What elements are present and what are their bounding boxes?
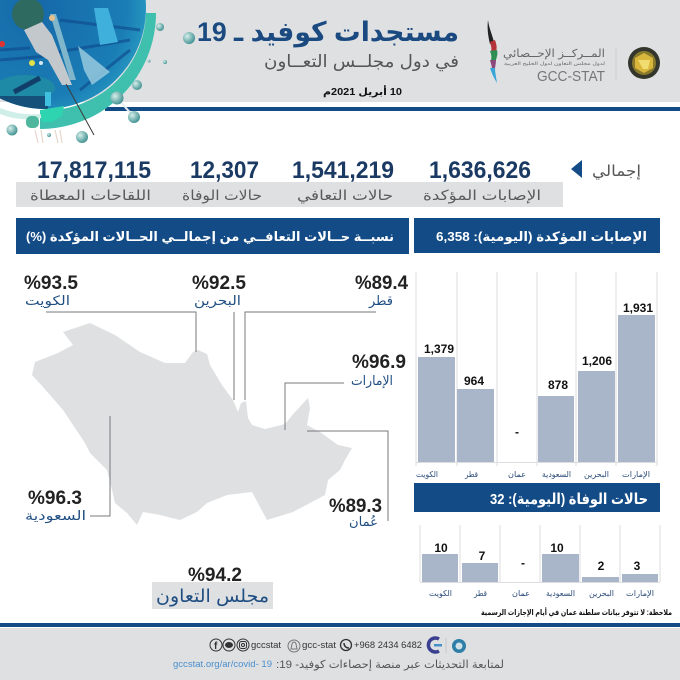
heading: [16, 218, 409, 254]
bar chart: قطر: [473, 589, 487, 598]
subtitle: في دول مجلــس التعــاون: [264, 52, 459, 72]
logo: GCC emblem: [628, 47, 660, 79]
social handle: gccstat: gccstat: [251, 640, 281, 651]
total: confirmed cases: الإصابات المؤكدة: [423, 187, 541, 204]
bar chart: 878: [548, 378, 568, 392]
bar chart: 1,931: [623, 301, 653, 315]
totals strip: [16, 157, 563, 207]
bar chart: البحرين: [584, 470, 609, 479]
label: Bahrain: البحرين: [194, 293, 241, 309]
bar chart: -: [521, 556, 525, 570]
icons: social media: [210, 639, 249, 652]
panel: daily deaths: [414, 483, 672, 617]
heading: نسبــة حــالات التعافــي من إجمالــي الحــالات المؤكدة (%): [26, 229, 394, 244]
bar chart: 1,379: [424, 342, 454, 356]
bar chart: 2: [598, 559, 605, 573]
totals arrow: [571, 160, 582, 178]
logo: GCC-STAT: GCC-STAT: [537, 68, 605, 85]
label: GCC total: مجلس التعاون: [156, 586, 269, 607]
label: Bahrain: %92.5: [192, 273, 246, 294]
logo: GCC-STAT: [488, 20, 616, 85]
bar chart: [420, 525, 660, 599]
bar chart: 964: [464, 374, 484, 388]
footer: [0, 623, 680, 680]
bar chart: 3: [634, 559, 641, 573]
bar chart: 1,206: [582, 354, 612, 368]
label: Saudi Arabia: %96.3: [28, 488, 82, 509]
label: GCC total: %94.2: [188, 565, 242, 586]
bar chart: قطر: [464, 470, 478, 479]
label: Qatar: [355, 273, 408, 309]
label: Qatar: قطر: [368, 293, 393, 309]
bar chart: عمان: [508, 470, 526, 479]
total: confirmed cases: [423, 157, 541, 204]
total: recoveries: حالات التعافي: [297, 187, 393, 204]
totals label: إجمالي: [592, 163, 641, 181]
bar chart: الكويت: [416, 470, 438, 479]
label: Qatar: %89.4: [355, 273, 408, 294]
bar chart: 7: [479, 549, 486, 563]
label: Saudi Arabia: [25, 488, 86, 524]
heading: الإصابات المؤكدة (اليومية): 6,358: [436, 229, 647, 244]
total: vaccines: [30, 157, 151, 203]
label: UAE: %96.9: [352, 352, 406, 373]
logo: round seal: [452, 639, 466, 653]
icons: social media: f: [214, 641, 218, 652]
bar chart: الإمارات: [622, 470, 650, 480]
date: 10 أبريل 2021م: [323, 85, 402, 98]
total: deaths: 12,307: [190, 157, 259, 184]
social handle: gcc-stat: gcc-stat: [302, 640, 336, 651]
label: Saudi Arabia: السعودية: [25, 508, 86, 524]
label: Oman: عُمان: [349, 514, 378, 529]
logo: G mark: [428, 638, 446, 653]
total: vaccines: اللقاحات المعطاة: [30, 187, 151, 203]
bar chart: 10: [550, 541, 564, 555]
updates text: لمتابعة التحديثات عبر منصة إحصاءات كوفيد- 19:: [276, 659, 504, 671]
bar chart: السعودية: [546, 589, 575, 598]
label: Kuwait: %93.5: [24, 273, 78, 294]
phone number: +968 2434 6482: [354, 640, 422, 651]
bar chart: [416, 272, 657, 480]
link: gccstat.org/ar/covid- 19: [173, 659, 272, 670]
label: Kuwait: الكويت: [25, 293, 70, 309]
label: Bahrain: [192, 273, 246, 309]
label: GCC total: [152, 565, 273, 609]
logo: GCC-STAT: المــركــز الإحــصائي: [503, 48, 605, 60]
logo: GCC-STAT: لدول مجلس التعاون لدول الخليج العربية: [504, 61, 605, 66]
panel: daily confirmed cases: [414, 218, 660, 480]
title: مستجدات كوفيد ـ 19: [197, 17, 459, 48]
decorative virus and skyline circle: [0, 0, 195, 143]
total: deaths: حالات الوفاة: [182, 187, 262, 204]
bar chart: عمان: [512, 589, 530, 598]
icon: whatsapp: [340, 640, 352, 650]
total: recoveries: 1,541,219: [292, 157, 394, 184]
label: Oman: %89.3: [329, 496, 382, 517]
panel: recovery rate map: [16, 218, 409, 609]
bar chart: -: [515, 425, 519, 439]
label: UAE: الإمارات: [351, 373, 393, 389]
map of GCC: [32, 323, 352, 525]
bar chart: الإمارات: [626, 589, 654, 599]
total: deaths: [182, 157, 262, 204]
label: Kuwait: [24, 273, 78, 309]
bar chart: الكويت: [429, 589, 452, 598]
total: confirmed cases: 1,636,626: [429, 157, 531, 184]
heading: حالات الوفاة (اليومية): 32: [490, 491, 648, 508]
bar chart: 10: [434, 541, 448, 555]
bar chart: السعودية: [542, 470, 571, 479]
icon: snapchat: [288, 640, 300, 652]
total: vaccines: 17,817,115: [37, 157, 151, 184]
leader lines: [46, 312, 388, 521]
total: recoveries: [292, 157, 394, 204]
label: UAE: [351, 352, 406, 389]
heading: [414, 483, 660, 512]
header band: [0, 0, 680, 111]
bar chart: البحرين: [589, 589, 614, 598]
heading: [414, 218, 660, 253]
label: Oman: [329, 496, 382, 529]
